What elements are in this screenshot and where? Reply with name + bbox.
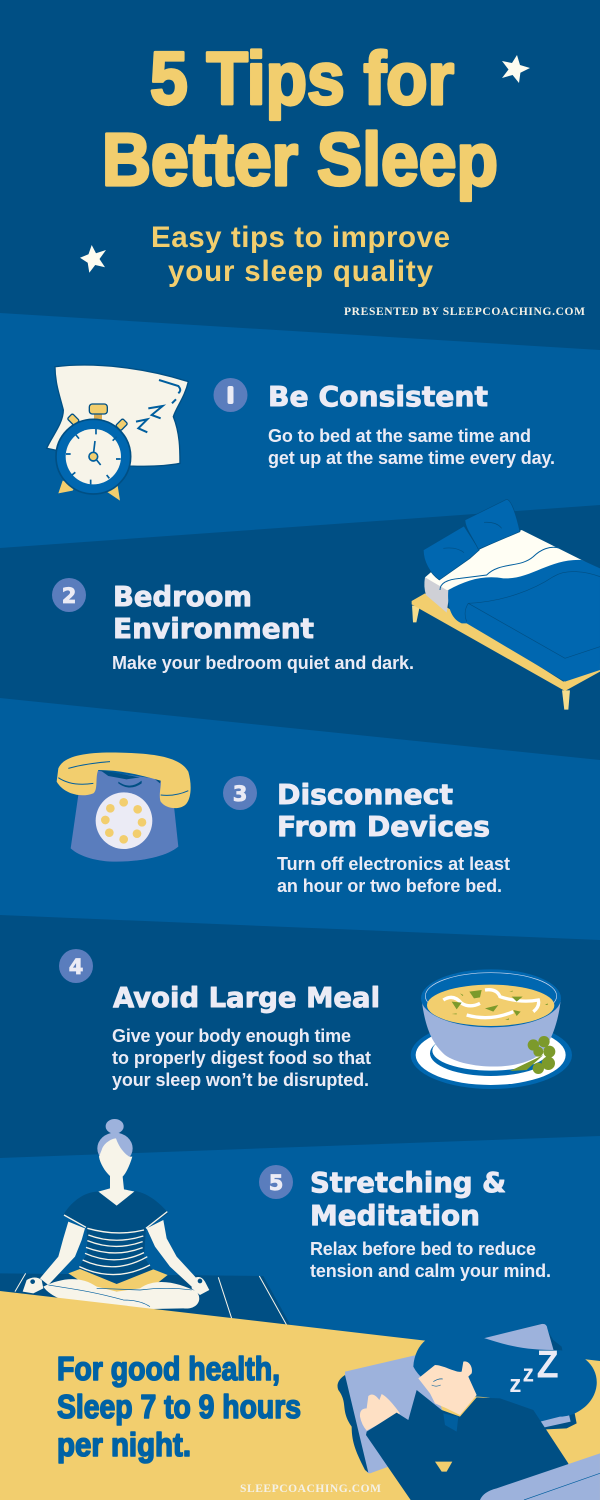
number badge 1 — [214, 378, 248, 412]
panel: tip 4 — [59, 949, 572, 1090]
number badge 5: 5 — [269, 1171, 283, 1195]
heading: Avoid Large Meal — [113, 982, 380, 1014]
title — [102, 37, 498, 201]
heading: From Devices — [277, 811, 490, 843]
number badge 3: 3 — [233, 782, 247, 806]
text — [277, 854, 510, 896]
text: Go to bed at the same time and — [268, 426, 531, 446]
snore letters — [509, 1343, 559, 1398]
number badge 4: 4 — [69, 955, 83, 979]
snore letters: z — [509, 1371, 521, 1398]
text — [112, 1026, 371, 1090]
icon: telephone — [57, 753, 191, 862]
panel: yellow footer — [0, 1291, 600, 1500]
heading: Stretching & — [310, 1167, 506, 1199]
text: your sleep won’t be disrupted. — [112, 1070, 369, 1090]
snore letters: z — [523, 1361, 534, 1388]
heading — [310, 1167, 506, 1232]
panel: tip 5 — [0, 1119, 551, 1330]
heading — [277, 779, 490, 843]
number badge 2: 2 — [62, 584, 76, 608]
text: to properly digest food so that — [112, 1048, 371, 1068]
text: get up at the same time every day. — [268, 448, 555, 468]
heading: Be Consistent — [268, 381, 488, 413]
number badge 4 — [59, 949, 93, 983]
text: Relax before bed to reduce — [310, 1239, 536, 1259]
title: 5 Tips for — [150, 37, 454, 120]
snore letters: Z — [537, 1343, 559, 1387]
title: Better Sleep — [102, 118, 498, 201]
subtitle — [151, 221, 450, 288]
icon: sleeping woman — [337, 1323, 600, 1500]
subtitle: your sleep quality — [168, 255, 434, 288]
icon: star top right — [502, 55, 530, 83]
icon: star left — [80, 245, 106, 273]
panel: tip 2 — [52, 499, 600, 710]
presenter credit: PRESENTED BY SLEEPCOACHING.COM — [344, 306, 585, 318]
number badge 2 — [52, 578, 86, 612]
text: Turn off electronics at least — [277, 854, 510, 874]
text: Make your bedroom quiet and dark. — [112, 653, 414, 673]
number badge 3 — [223, 776, 257, 810]
heading: Bedroom — [113, 581, 252, 613]
icon: meditating woman — [0, 1119, 293, 1330]
text — [310, 1239, 551, 1281]
heading — [113, 581, 314, 645]
icon: soup bowl — [411, 969, 572, 1089]
panel: tip 1 — [47, 365, 555, 501]
text: an hour or two before bed. — [277, 876, 502, 896]
number badge 5 — [259, 1165, 293, 1199]
icon: bed — [412, 499, 600, 710]
footer credit: SLEEPCOACHING.COM — [240, 1483, 381, 1495]
icon: pillow and alarm clock — [47, 365, 188, 501]
heading: Environment — [113, 613, 314, 645]
text — [268, 426, 555, 468]
subtitle: Easy tips to improve — [151, 221, 450, 254]
text: Give your body enough time — [112, 1026, 351, 1046]
callout: sleep hours: Sleep 7 to 9 hours — [57, 1388, 301, 1425]
text: tension and calm your mind. — [310, 1261, 551, 1281]
callout: sleep hours: For good health, — [57, 1350, 280, 1387]
callout: sleep hours — [57, 1350, 301, 1463]
callout: sleep hours: per night. — [57, 1426, 191, 1463]
heading: Meditation — [310, 1200, 480, 1232]
panel: tip 3 — [57, 753, 510, 896]
heading: Disconnect — [277, 779, 453, 811]
